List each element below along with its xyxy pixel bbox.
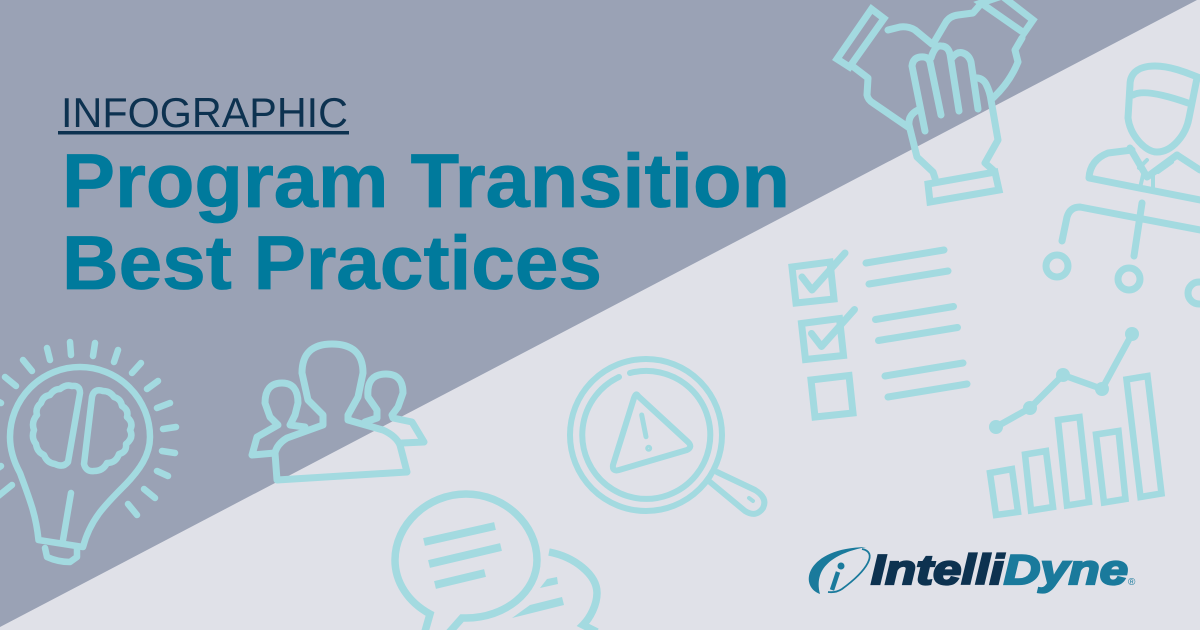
logo: IntelliDyne [809,546,1136,594]
logo wordmark: Intelli Dyne [871,546,1128,593]
title [62,139,790,306]
registered mark: ® [1128,577,1136,588]
title: Best Practices [62,221,602,306]
trend line [989,327,1139,434]
icon: magnifier with warning triangle [570,359,764,514]
icon: checklist [792,250,967,417]
eyebrow: INFOGRAPHIC: INFOGRAPHIC [61,89,348,136]
logo swoosh [809,547,870,594]
message lines [424,526,501,585]
icon: bar chart with trend line [989,327,1162,515]
small bubble [549,552,597,630]
icon: group of people [252,344,424,480]
large bubble [395,494,537,630]
bars [990,376,1162,515]
icon: light bulb with brain [0,342,176,562]
icon: businessperson with org chart [1046,66,1200,304]
icon: speech bubbles [395,494,597,630]
title: Program Transition [62,139,790,224]
small bubble lines [512,577,564,618]
icon: handshake [837,0,1033,202]
